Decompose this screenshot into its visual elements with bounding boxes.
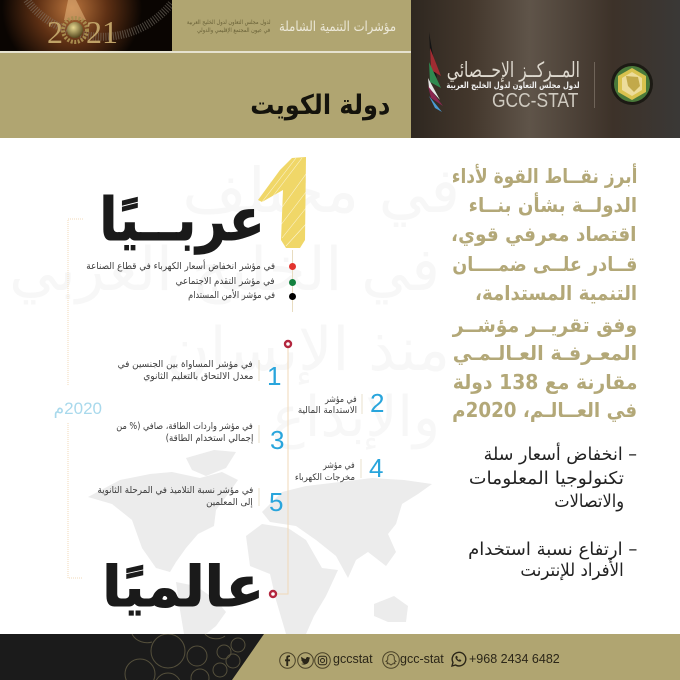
marker: timeline end [270, 591, 276, 597]
country title: دولة الكويت [250, 90, 390, 121]
item 4 [295, 453, 383, 483]
item 2: في مؤشر [325, 395, 357, 405]
item 4: 4 [369, 453, 383, 483]
item 3: إجمالي استخدام الطاقة) [165, 433, 253, 444]
item 5: 5 [269, 487, 283, 517]
list: arab rankings [86, 250, 296, 312]
paragraph: strengths in gold: اقتصاد معرفي قوي، [452, 222, 637, 246]
paragraph: strengths in gold [451, 163, 637, 422]
background: calligraphy watermark: في مختلف [182, 154, 460, 227]
year label: 2020م [54, 399, 102, 418]
item 5: إلى المعلمين [206, 497, 253, 508]
dot: red [288, 262, 296, 270]
item 1: معدل الالتحاق بالتعليم الثانوي [143, 371, 253, 382]
header band: gold [0, 0, 411, 138]
background: calligraphy watermark: في الخليج العربي [9, 235, 440, 305]
item 2: 2 [370, 388, 384, 418]
icon: ribbon flag [428, 33, 443, 112]
icon: snapchat [382, 651, 400, 669]
bullet 1: والاتصالات [554, 492, 624, 512]
bullet 1: – انخفاض أسعار سلة [484, 445, 637, 465]
item 2 [298, 388, 384, 418]
footer [0, 634, 680, 680]
background: calligraphy watermark: والإبداع [272, 385, 440, 450]
header image: 2021 banner [0, 0, 172, 51]
list text 2: في مؤشر التقدم الاجتماعي [176, 276, 275, 287]
paragraph: strengths in gold: التنمية المستدامة، [475, 281, 637, 305]
handle gcc-stat: gcc-stat [400, 652, 444, 666]
item 1: في مؤشر المساواة بين الجنسين في [118, 359, 253, 370]
icon: whatsapp [451, 652, 466, 667]
year 2021 [47, 14, 118, 50]
icon: GCC emblem [611, 63, 653, 105]
item 2: الاستدامة المالية [298, 406, 357, 416]
item 4: مخرجات الكهرباء [295, 473, 355, 483]
paragraph: strengths in gold: قــادر علــى ضمــــان [452, 252, 637, 276]
item 3: 3 [270, 425, 284, 455]
item 5: في مؤشر نسبة التلاميذ في المرحلة الثانوية [97, 485, 253, 496]
marker: timeline start [285, 341, 291, 347]
background: calligraphy watermark: منذ الإنسان [166, 315, 450, 385]
icon: twitter [297, 652, 314, 669]
heading: arabi: عربــيًا [100, 185, 265, 254]
dot: green [288, 278, 296, 286]
divider [594, 62, 595, 108]
header small note: لدول مجلس التعاون لدول الخليج العربية [186, 19, 270, 26]
logo arabic name: المــركــز الإحــصائي [447, 58, 580, 82]
background: calligraphy watermark [0, 140, 470, 450]
logo wordmark: GCC-STAT [492, 90, 578, 112]
bullet 2 [468, 540, 637, 581]
item 4: في مؤشر [323, 461, 355, 471]
phone number: +968 2434 6482 [469, 652, 560, 666]
heading: alamiyan: عالميًا [102, 555, 264, 620]
paragraph: strengths in gold: المعـرفـة العـالـمـي [452, 341, 637, 365]
item 3 [116, 421, 284, 455]
item 3: في مؤشر واردات الطاقة، صافي (% من [116, 421, 253, 432]
dot: black [288, 292, 296, 300]
paragraph: strengths in gold: مقارنة مع 138 دولة [452, 370, 637, 394]
paragraph: strengths in gold: الدولــة بشأن بنــاء [469, 193, 637, 217]
year 2021: 21 [86, 14, 118, 50]
logo arabic subtitle: لدول مجلس التعاون لدول الخليج العربية [447, 81, 580, 91]
item 5 [97, 485, 283, 517]
header subtitle: مؤشرات التنمية الشاملة [279, 19, 396, 35]
item 1 [118, 359, 281, 391]
list text 1: في مؤشر انخفاض أسعار الكهرباء في قطاع الصناعة [86, 261, 275, 272]
header small note [186, 19, 270, 34]
bullet 1: تكنولوجيا المعلومات [469, 469, 624, 489]
bullet 2: الأفراد للإنترنت [521, 561, 624, 581]
footer dark pattern panel [0, 634, 264, 680]
logo panel [411, 0, 680, 138]
item 1: 1 [267, 361, 281, 391]
handle gccstat: gccstat [333, 652, 373, 666]
bullet 2: – ارتفاع نسبة استخدام [468, 540, 637, 560]
icon: facebook [279, 652, 296, 669]
icon: instagram [314, 652, 331, 669]
header small note: في عيون المجتمع الإقليمي والدولي [197, 27, 270, 34]
bullet 1 [469, 442, 637, 512]
paragraph: strengths in gold: في العــالـم، 2020م [452, 398, 637, 422]
big yellow number 1 [258, 157, 306, 248]
paragraph: strengths in gold: أبرز نقــاط القوة لأداء [451, 164, 637, 188]
list text 3: في مؤشر الأمن المستدام [188, 290, 275, 301]
paragraph: strengths in gold: وفق تقريــر مؤشــر [453, 313, 637, 337]
social icons and contacts [279, 651, 560, 669]
year 2021: 2 [47, 14, 63, 50]
